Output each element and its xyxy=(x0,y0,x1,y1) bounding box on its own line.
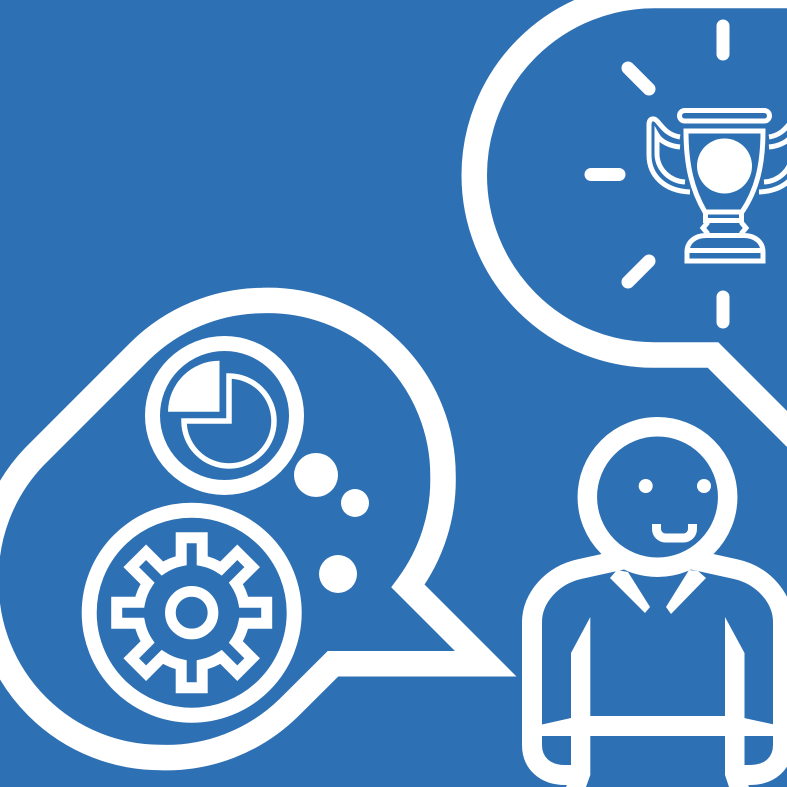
trophy stem xyxy=(703,212,746,234)
person arm: left xyxy=(566,617,590,787)
rays around trophy xyxy=(591,26,723,322)
thought dots xyxy=(294,453,369,593)
person waistband xyxy=(590,716,725,736)
trophy medallion xyxy=(697,138,752,194)
trophy handle: right xyxy=(759,119,787,192)
trophy cup xyxy=(686,131,763,212)
pie chart slice xyxy=(168,361,220,412)
icon: pie chart xyxy=(152,344,296,488)
person body outline xyxy=(532,558,783,775)
person smile xyxy=(656,524,692,538)
icon: person xyxy=(532,427,783,787)
pie chart ring xyxy=(152,344,296,488)
icon: gear xyxy=(89,510,294,715)
trophy base xyxy=(687,236,763,261)
person collar: left xyxy=(610,570,650,613)
speech bubble: top right xyxy=(474,0,787,452)
person eyes xyxy=(639,479,711,493)
speech bubble: bottom left xyxy=(0,300,486,758)
gear ring xyxy=(89,510,294,715)
icon: trophy xyxy=(649,110,787,261)
pie chart remainder xyxy=(184,376,274,466)
gear hub xyxy=(170,591,213,634)
gear teeth xyxy=(117,538,267,688)
trophy rim xyxy=(680,110,770,121)
person arm: right xyxy=(725,617,749,787)
person head xyxy=(587,427,728,567)
trophy handle: left xyxy=(649,119,690,192)
person collar: right xyxy=(666,570,706,614)
